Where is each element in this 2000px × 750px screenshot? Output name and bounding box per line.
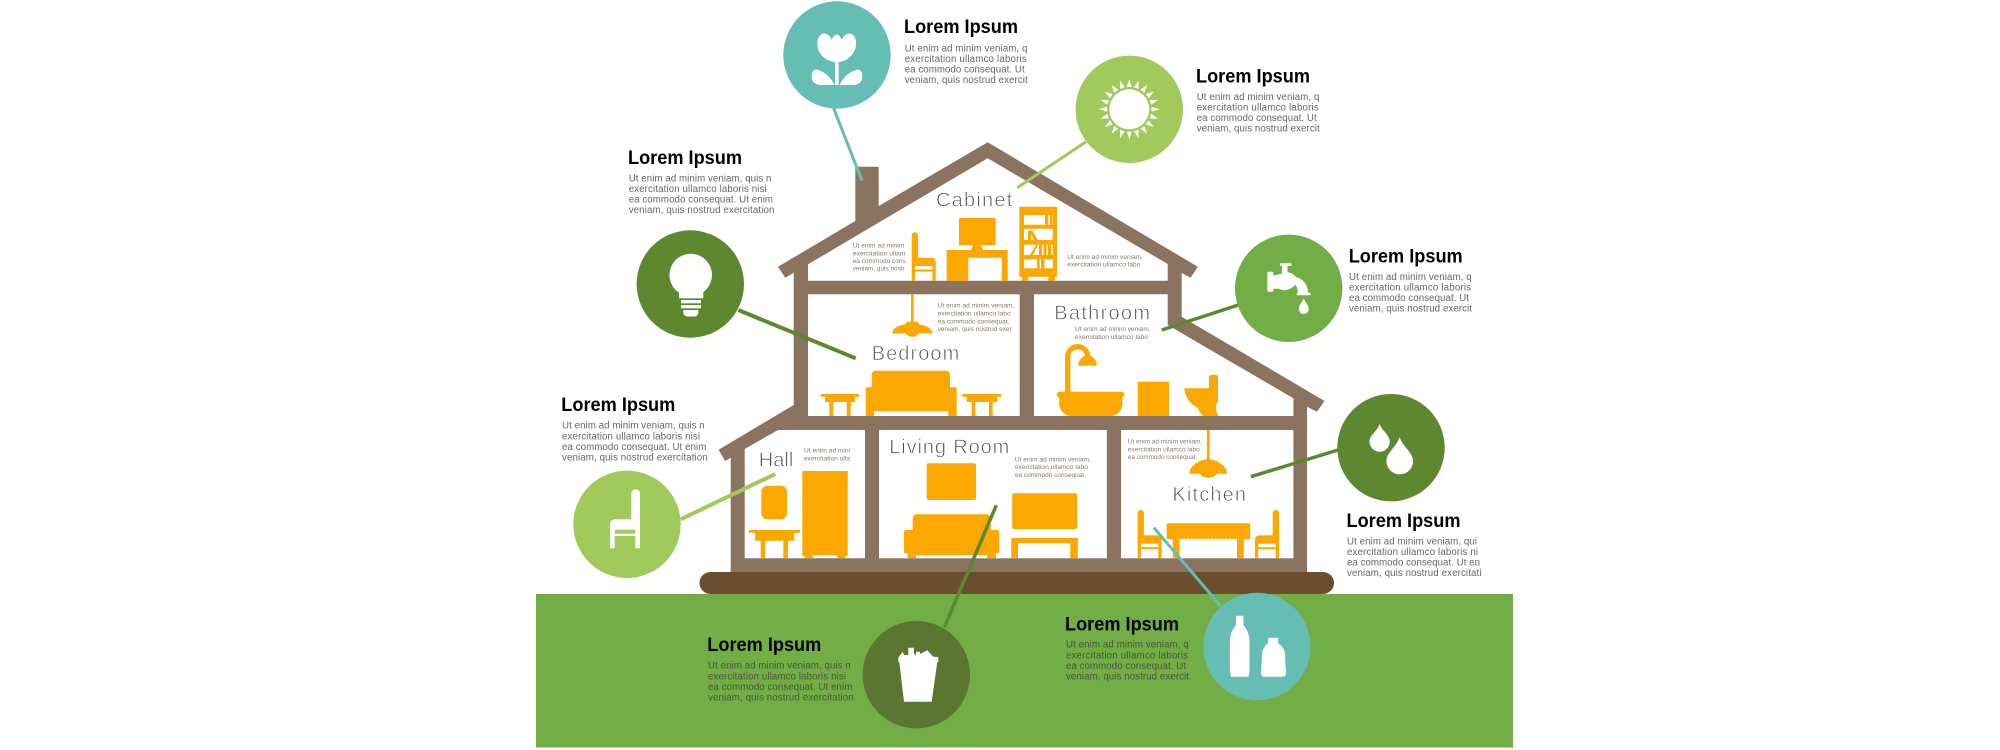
text block: drops: Lorem Ipsum (1346, 511, 1460, 532)
text block: tap: exercitation ullamco laboris (1349, 282, 1471, 293)
text block: tap (1349, 246, 1472, 315)
caption: kitchen: ea commodo consequat. (1128, 454, 1197, 461)
text block: chair (561, 395, 708, 463)
caption: bathroom: Ut enim ad minim veniam, (1075, 326, 1151, 333)
caption: bedroom: ea commodo consequat. (938, 318, 1010, 325)
caption: cabinet right: exercitation ullamco labo (1067, 262, 1141, 269)
walls and roof (719, 142, 1324, 572)
icon: chair (573, 471, 681, 578)
hall mirror (761, 486, 787, 519)
shower (1068, 347, 1097, 393)
connector: bulb to bedroom (738, 310, 856, 358)
text block: drops: exercitation ullamco laboris ni (1347, 547, 1478, 558)
ground panel (536, 594, 1513, 748)
text block: drops: ea commodo consequat. Ut en (1347, 558, 1480, 569)
connector: drops to kitchen (1251, 450, 1338, 477)
label: cabinet: Cabinet (936, 190, 1013, 212)
label: bedroom: Bedroom (872, 343, 959, 365)
text block: flower: exercitation ullamco laboris (905, 54, 1027, 65)
caption: bathroom (1075, 326, 1151, 341)
connector: tap to bathroom (1162, 305, 1238, 330)
right side table (962, 394, 1001, 416)
room: kitchen (1121, 430, 1293, 558)
text block: bottles: Ut enim ad minim veniam, q (1066, 640, 1189, 651)
text block: bucket: exercitation ullamco laboris nisi (708, 671, 846, 682)
text block: chair: veniam, quis nostrud exercitation (562, 452, 708, 463)
cabinet chair (912, 232, 936, 281)
icon: bucket (863, 621, 970, 728)
text block: sun: Ut enim ad minim veniam, q (1197, 92, 1319, 103)
icon: bottles (1203, 593, 1311, 700)
caption: cabinet left: ea commodo cons (853, 258, 906, 265)
label: hall: Hall (759, 449, 793, 471)
caption: cabinet left (853, 242, 906, 273)
connector: bucket to living room (944, 505, 996, 627)
text block: sun: veniam, quis nostrud exercit (1197, 124, 1320, 135)
text block: bulb: Ut enim ad minim veniam, quis n (629, 174, 771, 185)
room: cabinet (808, 158, 1168, 281)
hall table (749, 530, 800, 558)
text block: flower: veniam, quis nostrud exercit (905, 75, 1028, 86)
wall picture (927, 463, 976, 500)
label: kitchen: Kitchen (1172, 484, 1246, 506)
label: bathroom: Bathroom (1054, 302, 1150, 324)
caption: bedroom: exercitation ullamco labo (938, 311, 1011, 318)
text block: bottles: exercitation ullamco laboris (1066, 650, 1188, 661)
text block: flower: ea commodo consequat. Ut (905, 64, 1025, 76)
caption: bedroom: veniam, quis nostrud exer (938, 326, 1013, 333)
text block: bucket: veniam, quis nostrud exercitation (708, 692, 854, 703)
text block: chair: Lorem Ipsum (561, 395, 675, 416)
kitchen right chair (1255, 510, 1279, 558)
caption: cabinet left: Ut enim ad minim (853, 242, 904, 250)
caption: living room: ea commodo consequat. (1015, 472, 1086, 479)
icon: sun (1076, 56, 1183, 163)
text block: tap: Ut enim ad minim veniam, q (1349, 272, 1472, 283)
bedroom sofa (866, 371, 957, 416)
text block: drops (1346, 511, 1482, 579)
monitor (959, 218, 996, 250)
text block: drops: veniam, quis nostrud exercitati (1347, 568, 1482, 579)
kitchen left chair (1138, 510, 1162, 558)
caption: living room: exercitation ullamco labo (1015, 464, 1088, 471)
caption: cabinet right: Ut enim ad minim veniam, (1067, 254, 1143, 261)
tv stand (1011, 538, 1078, 558)
text block: bulb: veniam, quis nostrud exercitation (629, 205, 774, 216)
left side table (821, 394, 859, 416)
house structure (719, 142, 1324, 572)
text block: sun: ea commodo consequat. Ut (1197, 113, 1317, 124)
text block: bottles (1065, 614, 1189, 682)
room: hall (745, 430, 865, 558)
bedroom furniture (821, 294, 1001, 416)
bookshelf (1019, 207, 1057, 281)
text block: chair: Ut enim ad minim veniam, quis n (562, 421, 705, 432)
text block: bulb (628, 148, 774, 216)
text block: sun: exercitation ullamco laboris (1197, 103, 1319, 114)
bathtub (1057, 392, 1124, 416)
living room furniture (904, 463, 1078, 558)
text block: bucket: Ut enim ad minim veniam, quis n (708, 661, 851, 672)
caption: living room (1015, 456, 1091, 479)
connector: bottles to kitchen (1154, 528, 1220, 606)
text block: chair: exercitation ullamco laboris nisi (562, 431, 700, 442)
caption: kitchen (1128, 439, 1202, 461)
bathroom furniture (1057, 347, 1218, 416)
desk (947, 250, 1008, 281)
icon: water drops (1337, 394, 1445, 501)
hall furniture (749, 471, 848, 558)
caption: cabinet left: exercitation ullam (853, 250, 905, 257)
kitchen furniture (1138, 430, 1279, 558)
text block: flower: Lorem Ipsum (904, 17, 1018, 38)
icon: light bulb (637, 230, 744, 338)
text block: bucket: ea commodo consequat. Ut enim (708, 682, 852, 693)
caption: kitchen: Ut enim ad minim veniam, (1128, 439, 1202, 446)
connector: sun to cabinet (1017, 142, 1086, 188)
text block: bottles: Lorem Ipsum (1065, 614, 1179, 635)
wardrobe (802, 471, 848, 558)
kitchen table (1167, 523, 1250, 558)
text block: chair: ea commodo consequat. Ut enim (562, 442, 706, 453)
room: bathroom (1034, 294, 1293, 416)
text block: bulb: ea commodo consequat. Ut enim (629, 195, 773, 206)
text block: bottles: veniam, quis nostrud exercit (1066, 671, 1189, 682)
text block: bulb: Lorem Ipsum (628, 148, 742, 169)
icon: flower (783, 1, 891, 109)
toilet (1184, 375, 1218, 416)
kitchen lamp (1189, 430, 1227, 478)
room: bedroom (808, 294, 1020, 416)
text block: bulb: exercitation ullamco laboris nisi (629, 184, 767, 195)
caption: living room: Ut enim ad minim veniam, (1015, 456, 1091, 463)
text block: flower (904, 17, 1028, 86)
text block: flower: Ut enim ad minim veniam, q (905, 44, 1027, 54)
text block: bottles: ea commodo consequat. Ut (1066, 661, 1186, 672)
caption: bedroom (938, 303, 1015, 333)
caption: bedroom: Ut enim ad minim veniam, (938, 303, 1015, 310)
room: living room (879, 430, 1107, 558)
text block: tap: Lorem Ipsum (1349, 246, 1463, 267)
caption: hall: Ut enim ad mini (804, 447, 850, 454)
text block: tap: veniam, quis nostrud exercit (1349, 304, 1472, 315)
caption: bathroom: exercitation ullamco labo (1075, 334, 1148, 341)
label: living room: Living Room (889, 436, 1009, 458)
caption: cabinet left: veniam, quis nostr (853, 266, 906, 273)
connector: flower to chimney (834, 108, 862, 181)
house foundation (700, 572, 1334, 594)
caption: hall (804, 447, 850, 462)
text block: bucket: Lorem Ipsum (707, 635, 821, 656)
room labels (759, 190, 1246, 506)
caption: kitchen: exercitation ullamco labo (1128, 446, 1200, 453)
caption: cabinet right (1067, 254, 1143, 269)
text block: tap: ea commodo consequat. Ut (1349, 293, 1469, 304)
text block: sun (1196, 67, 1320, 135)
text block: sun: Lorem Ipsum (1196, 67, 1310, 88)
text block: bucket (707, 635, 854, 703)
icon: water tap (1235, 235, 1342, 342)
text block: drops: Ut enim ad minim veniam, qui (1347, 537, 1477, 548)
bathroom cabinet (1138, 382, 1169, 416)
living room sofa (904, 514, 999, 558)
bedroom lamp (892, 294, 933, 337)
cabinet furniture (912, 207, 1057, 281)
caption: hall: exercitation ulla (804, 455, 850, 462)
room captions (804, 242, 1202, 479)
television (1012, 493, 1077, 529)
connector: chair to hall (681, 474, 775, 519)
